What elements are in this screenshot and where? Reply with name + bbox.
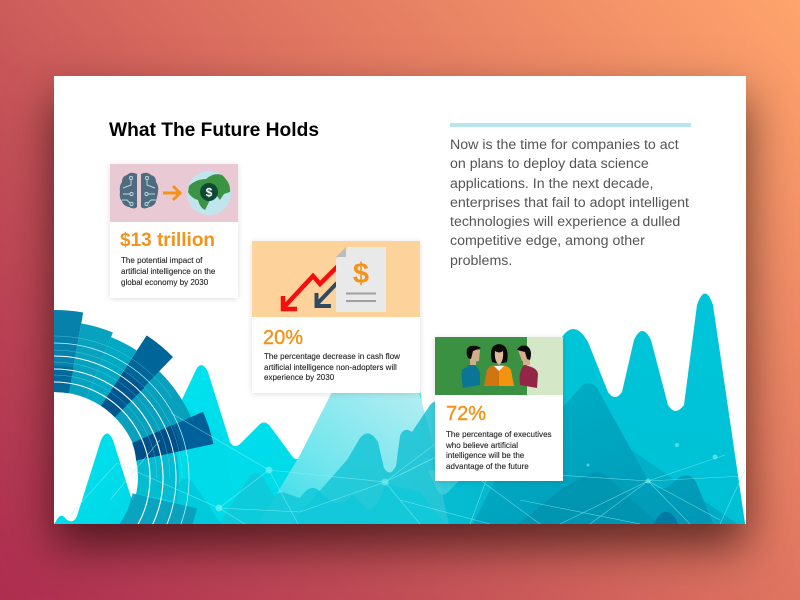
segment: dark right xyxy=(133,412,213,460)
segment: dark right inner xyxy=(133,425,181,460)
mountain: cyan backing inside ring xyxy=(132,432,156,502)
text block: intro paragraph: enterprises that fail to adopt intelligent xyxy=(450,195,689,211)
text: description: global economy by 2030 xyxy=(121,278,208,287)
mountain: middle dark teal right xyxy=(470,383,716,530)
segment: top xyxy=(54,310,83,393)
mountain: lower deep blue xyxy=(518,472,645,524)
mountain: small deep peak xyxy=(654,512,678,524)
icon: arrow xyxy=(163,186,180,200)
mountain: translucent light centre peak xyxy=(272,393,449,524)
arcs: faint concentric lines xyxy=(54,336,182,478)
text: description xyxy=(264,352,400,382)
icon: red arrow xyxy=(283,264,340,309)
panel: main white slide xyxy=(54,76,746,524)
icon: document xyxy=(336,247,386,312)
text: description xyxy=(121,256,215,287)
icon: dark arrow xyxy=(316,283,337,306)
segment: lower xyxy=(118,493,197,526)
figure: 20%: 20% xyxy=(263,327,303,349)
text block: intro paragraph: problems. xyxy=(450,253,512,269)
arcs: white rings xyxy=(54,343,189,526)
text: description: experience by 2030 xyxy=(264,373,334,382)
text: description: artificial intelligence on the xyxy=(121,267,215,276)
segment: dark upper xyxy=(101,335,173,417)
text block: intro paragraph: technologies will experience a dulled xyxy=(450,214,680,230)
icon: person right xyxy=(517,346,538,388)
text: description xyxy=(446,430,552,471)
mountain: left cyan ridges xyxy=(182,365,422,524)
segment: top dark inner xyxy=(54,366,74,393)
accent rule xyxy=(450,123,691,127)
text block: intro paragraph: Now is the time for companies to act xyxy=(450,137,679,153)
icon: falling arrows and invoice xyxy=(252,241,420,317)
mountain: central foreground teal xyxy=(220,473,445,524)
icon: three people xyxy=(435,337,563,395)
card: 20% xyxy=(252,241,420,393)
text: description: who believe artificial xyxy=(446,441,518,450)
heading: What The Future Holds xyxy=(109,120,319,141)
mountain: left small peak xyxy=(54,434,132,524)
icon: brain xyxy=(120,173,158,208)
segment: second xyxy=(69,323,113,398)
icon: person left xyxy=(462,346,481,388)
mountain: far right peaks xyxy=(440,294,746,524)
mountain: scalloped lobes under card xyxy=(428,470,459,495)
segment: inner pale xyxy=(136,452,179,502)
network: thin connecting lines xyxy=(70,410,745,524)
text: description: artificial intelligence non-adopters will xyxy=(264,363,397,372)
text block: intro paragraph: applications. In the next decade, xyxy=(450,176,654,192)
ring: radial segments xyxy=(54,310,213,526)
segment: dark upper inner xyxy=(101,371,144,417)
network: glowing nodes xyxy=(216,428,718,512)
mountain: teal hump behind ring xyxy=(172,478,222,524)
icon: brain, arrow and globe xyxy=(110,164,238,222)
mountain: base teal band xyxy=(314,402,737,524)
text: description: The potential impact of xyxy=(121,256,202,265)
icon: globe with dollar: $ xyxy=(206,186,213,200)
text: description: The percentage of executives xyxy=(446,430,552,439)
segment: fourth xyxy=(115,371,191,443)
text block: intro paragraph xyxy=(450,137,689,269)
figure: 72%: 72% xyxy=(446,403,486,425)
card: $13 trillion xyxy=(110,164,238,298)
icon: person centre xyxy=(484,344,514,386)
text block: intro paragraph: on plans to deploy data science xyxy=(450,156,649,172)
text: description: The percentage decrease in cash flow xyxy=(264,352,400,361)
icon: document: $ xyxy=(353,258,369,290)
text: description: advantage of the future xyxy=(446,462,529,471)
figure: $13 trillion: $13 trillion xyxy=(120,230,215,251)
text block: intro paragraph: competitive edge, among other xyxy=(450,233,645,249)
chart art: cyan mountains, radial ring and network xyxy=(54,294,746,524)
segment: third xyxy=(86,337,137,406)
card: 72% xyxy=(435,337,563,481)
text: description: intelligence will be the xyxy=(446,451,524,460)
